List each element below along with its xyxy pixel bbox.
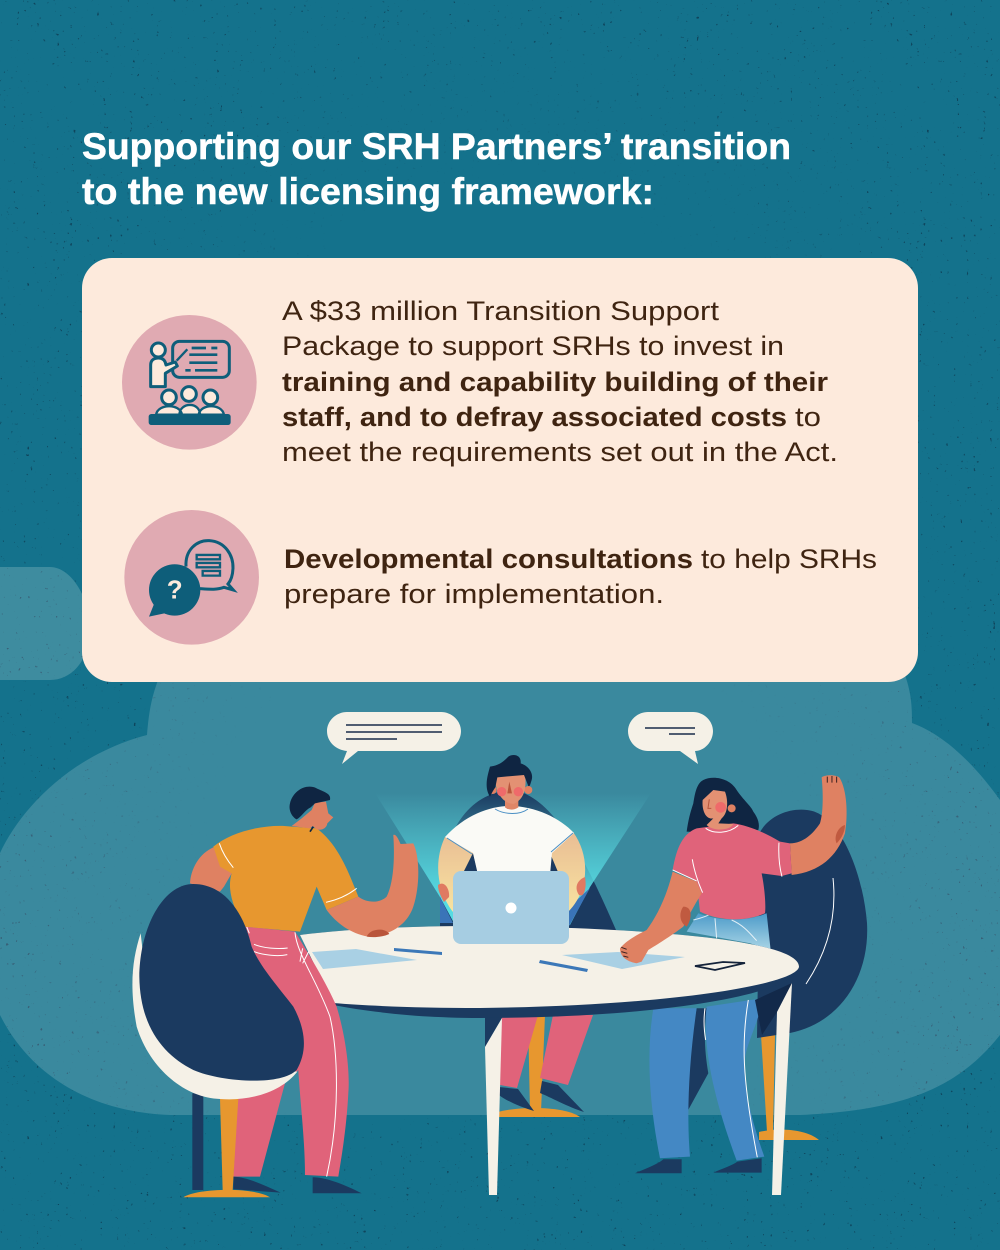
text: transition support package: A $33 million Transition Support (282, 296, 720, 326)
right chair (757, 810, 867, 1140)
middle chair (440, 790, 616, 930)
title: Supporting our SRH Partners’ transition (82, 126, 791, 167)
middle person legs and stool (498, 1015, 593, 1117)
left person head (292, 802, 333, 830)
phone (695, 962, 745, 970)
middle person arms (438, 832, 585, 912)
left person front arm (327, 835, 418, 937)
right person head (703, 790, 733, 830)
right person forearm and hand (620, 872, 702, 963)
right person shirt (673, 823, 792, 919)
table leg: left (485, 1018, 502, 1195)
text: transition support package: meet the requirements set out in the Act. (282, 437, 838, 467)
background cloud (0, 675, 1000, 1115)
right person shoes (635, 1158, 762, 1173)
left person shoes (233, 1177, 362, 1193)
table top (300, 926, 799, 1018)
title (82, 126, 791, 212)
icon: question and answer bubbles: ? (167, 574, 183, 604)
left chair legs (220, 1098, 238, 1190)
table leg: right (772, 983, 792, 1195)
right person jeans top (687, 913, 771, 950)
right person hair (687, 778, 759, 833)
left person legs (233, 927, 349, 1177)
text: transition support package: Package to support SRHs to invest in (282, 331, 784, 361)
panel: support measures (82, 258, 918, 682)
left person (132, 787, 418, 1197)
laptop light beam (375, 793, 651, 925)
text: developmental consultations (284, 544, 877, 609)
pens (394, 948, 588, 972)
speech bubble: right (628, 712, 713, 764)
text: transition support package: training and capability building of their (282, 367, 829, 397)
left chair (132, 933, 297, 1099)
middle person (438, 755, 590, 928)
left person shirt (213, 826, 358, 932)
icon: presenter and audience (122, 315, 257, 450)
text: developmental consultations: Developmental consultations (284, 544, 693, 574)
left person back arm (190, 847, 232, 892)
right person raised arm (790, 775, 847, 875)
decorative small cloud (0, 567, 90, 680)
middle person shirt (445, 806, 574, 875)
text: transition support package: staff, and to defray associated costs (282, 402, 787, 432)
illustration: team meeting around a table (132, 712, 867, 1197)
paper sheets (312, 949, 685, 969)
right person (635, 775, 847, 1173)
table (300, 926, 799, 1195)
text: transition support package: to (795, 402, 821, 432)
text: developmental consultations: to help SRHs (701, 544, 877, 574)
middle person head (487, 755, 532, 810)
laptop (453, 871, 569, 944)
icon: question and answer bubbles (124, 510, 259, 645)
title: to the new licensing framework: (82, 171, 654, 212)
middle person blue shading (440, 888, 590, 928)
right person legs (687, 1008, 708, 1112)
speech bubble: left (327, 712, 461, 764)
text: transition support package (282, 296, 838, 467)
table rear legs shading (485, 1015, 502, 1047)
text: developmental consultations: prepare for implementation. (284, 579, 664, 609)
